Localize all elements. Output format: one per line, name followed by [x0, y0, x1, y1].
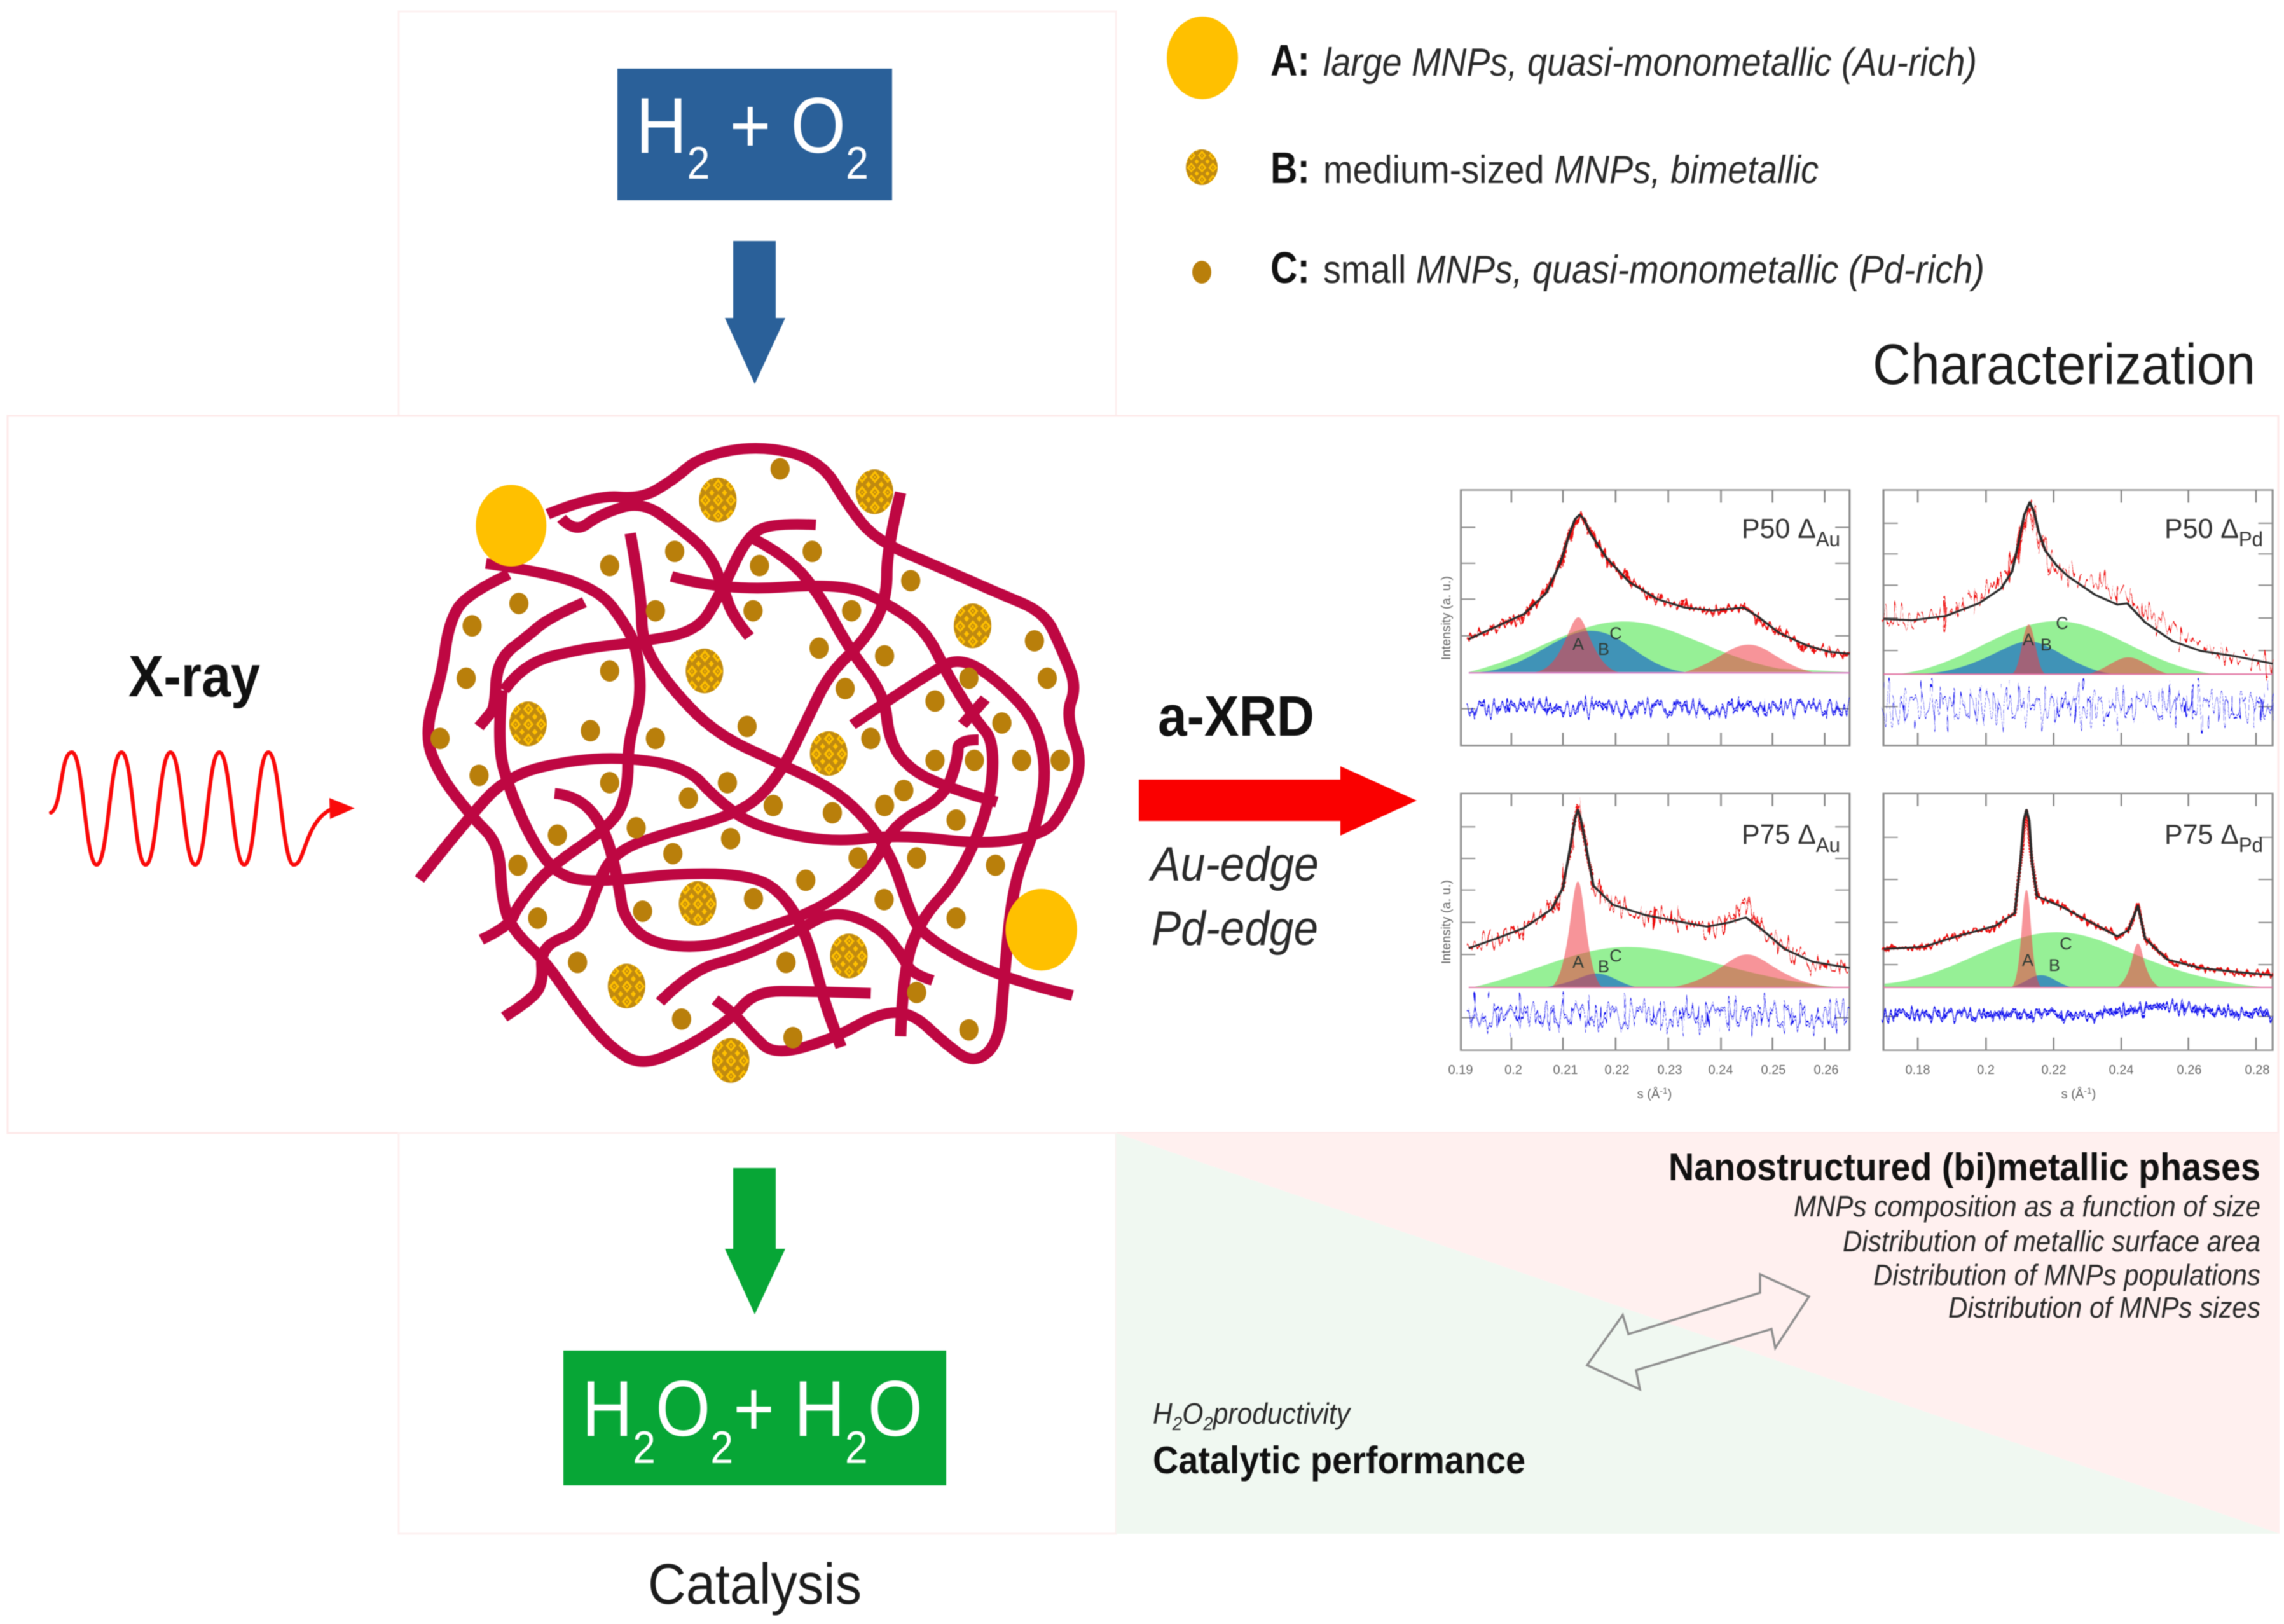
chart: P75 Au edge: A — [1572, 953, 1584, 972]
x axis labels: ) — [1668, 1087, 1672, 1101]
x axis labels: 0.19 — [1448, 1063, 1473, 1077]
text block: catalytic performance: 2 — [1202, 1414, 1213, 1435]
chart: P75 Au edge: B — [1598, 957, 1609, 976]
chart: P75 Au edge: Au — [1816, 834, 1840, 857]
legend item A — [1167, 17, 1977, 99]
legend item B: medium-sized MNPs, bimetallic — [1323, 148, 1819, 192]
x axis labels: 0.25 — [1761, 1063, 1785, 1077]
text block: catalytic performance: H — [1153, 1397, 1174, 1430]
x axis labels: 0.22 — [2042, 1063, 2066, 1077]
reactant box: H2 + O2 — [617, 69, 892, 200]
products box: H2O2 + H2O: 2 — [710, 1422, 733, 1473]
x axis labels: 0.18 — [1906, 1063, 1930, 1077]
chart: P50 Au edge: A — [1572, 635, 1584, 654]
icon: x-ray wave — [51, 752, 355, 865]
x axis labels: 0.26 — [1814, 1063, 1838, 1077]
polymer strands — [420, 448, 1079, 1061]
legend item C: C: — [1270, 243, 1310, 292]
x axis labels: 0.2 — [1977, 1063, 1995, 1077]
products box: H2O2 + H2O: 2 — [845, 1422, 868, 1473]
panel: central band — [8, 416, 2278, 1133]
medium particles B — [509, 469, 991, 1083]
label: X-ray: X-ray — [128, 644, 260, 709]
x axis labels: 0.28 — [2245, 1063, 2269, 1077]
legend item A: large MNPs, quasi-monometallic (Au-rich) — [1323, 41, 1977, 85]
chart: P50 Au edge: C — [1609, 624, 1622, 643]
legend item B — [1186, 143, 1819, 193]
chart: P50 Pd edge — [1883, 490, 2273, 745]
chart: P75 Au edge: P75 Δ — [1742, 819, 1818, 850]
text block: catalytic performance: 2 — [1172, 1414, 1182, 1435]
x axis labels: -1 — [1660, 1085, 1668, 1096]
text block: nanostructured phases — [1668, 1146, 2260, 1324]
legend item A: A: — [1270, 36, 1310, 85]
chart: P50 Pd edge: B — [2040, 635, 2052, 654]
chart: P75 Pd edge: B — [2049, 956, 2060, 975]
x axis labels: 0.23 — [1658, 1063, 1682, 1077]
large particles A — [476, 485, 1077, 970]
x axis labels: -1 — [2084, 1085, 2092, 1096]
x axis labels: 0.21 — [1553, 1063, 1578, 1077]
chart: P75 Au edge — [1440, 794, 1850, 1101]
heading: Characterization: Characterization — [1873, 333, 2255, 397]
icon: double-headed arrow — [1587, 1274, 1809, 1389]
arrow: a-XRD — [1139, 766, 1417, 836]
text block: catalytic performance: O — [1182, 1397, 1203, 1430]
products box: H2O2 + H2O: O — [656, 1365, 710, 1453]
chart: P50 Au edge: P50 Δ — [1742, 513, 1818, 544]
products box: H2O2 + H2O: + H — [733, 1365, 845, 1453]
panel: products box — [399, 1133, 1116, 1534]
x axis labels: s (Å — [2061, 1087, 2084, 1101]
legend: particle types — [1167, 17, 1985, 292]
products box: H2O2 + H2O: 2 — [633, 1422, 656, 1473]
reactant box: H2 + O2: H — [636, 82, 693, 170]
panel: reactants box — [399, 11, 1116, 416]
chart: P50 Pd edge: P50 Δ — [2164, 513, 2241, 544]
products box: H2O2 + H2O — [563, 1351, 946, 1485]
x axis labels: 0.22 — [1605, 1063, 1629, 1077]
label: Au-edge: Au-edge — [1148, 837, 1319, 891]
illustration: polymer network with nanoparticles — [420, 448, 1079, 1083]
reactant box: H2 + O2: 2 — [846, 138, 869, 189]
panel: nanostructure triangle — [1116, 1133, 2280, 1534]
arrow: reactants into catalyst — [725, 241, 785, 384]
chart: P50 Pd edge: C — [2056, 614, 2068, 633]
chart: P75 Au edge: C — [1609, 946, 1622, 965]
chart: P75 Pd edge: A — [2022, 951, 2033, 970]
x axis labels: 0.24 — [1709, 1063, 1733, 1077]
text block: nanostructured phases: Distribution of MNPs sizes — [1948, 1291, 2260, 1324]
x axis labels: s (Å — [1637, 1087, 1660, 1101]
chart: P75 Pd edge: Pd — [2239, 834, 2263, 857]
products box: H2O2 + H2O: H — [582, 1365, 639, 1453]
text block: catalytic performance: Catalytic performance — [1153, 1439, 1525, 1482]
x axis labels: 0.26 — [2177, 1063, 2201, 1077]
chart: P50 Pd edge: A — [2023, 630, 2034, 649]
x axis labels: 0.2 — [1504, 1063, 1522, 1077]
label: Pd-edge: Pd-edge — [1152, 902, 1318, 956]
panel: catalysis triangle — [1116, 1133, 2280, 1534]
x axis labels: ) — [2092, 1087, 2096, 1101]
reactant box: H2 + O2: 2 — [687, 138, 710, 189]
arrow: catalyst to products — [725, 1168, 785, 1314]
chart: P50 Au edge: Intensity (a. u.) — [1440, 576, 1454, 660]
chart: P50 Pd edge: Pd — [2239, 528, 2263, 551]
small particles C — [430, 458, 1070, 1049]
legend item C — [1192, 243, 1985, 292]
chart: P75 Pd edge: P75 Δ — [2164, 819, 2241, 850]
reactant box: H2 + O2: + O — [710, 82, 846, 170]
products box: H2O2 + H2O: O — [868, 1365, 923, 1453]
chart: P75 Au edge: Intensity (a. u.) — [1440, 880, 1454, 964]
legend item C: small MNPs, quasi-monometallic (Pd-rich) — [1323, 248, 1985, 292]
text block: catalytic performance — [1153, 1397, 1525, 1482]
chart: P75 Pd edge — [1883, 794, 2273, 1101]
label: a-XRD: a-XRD — [1158, 685, 1314, 748]
chart: P50 Au edge — [1440, 490, 1850, 745]
x axis labels — [1906, 1063, 2269, 1101]
chart: P75 Pd edge: C — [2060, 934, 2072, 953]
legend item B: B: — [1270, 143, 1310, 193]
heading: Catalysis: Catalysis — [648, 1553, 862, 1616]
chart: P50 Au edge: B — [1598, 640, 1609, 659]
x axis labels: 0.24 — [2109, 1063, 2133, 1077]
chart: P50 Au edge: Au — [1816, 528, 1840, 551]
text block: catalytic performance: productivity — [1212, 1397, 1352, 1430]
x axis labels — [1448, 1063, 1838, 1101]
